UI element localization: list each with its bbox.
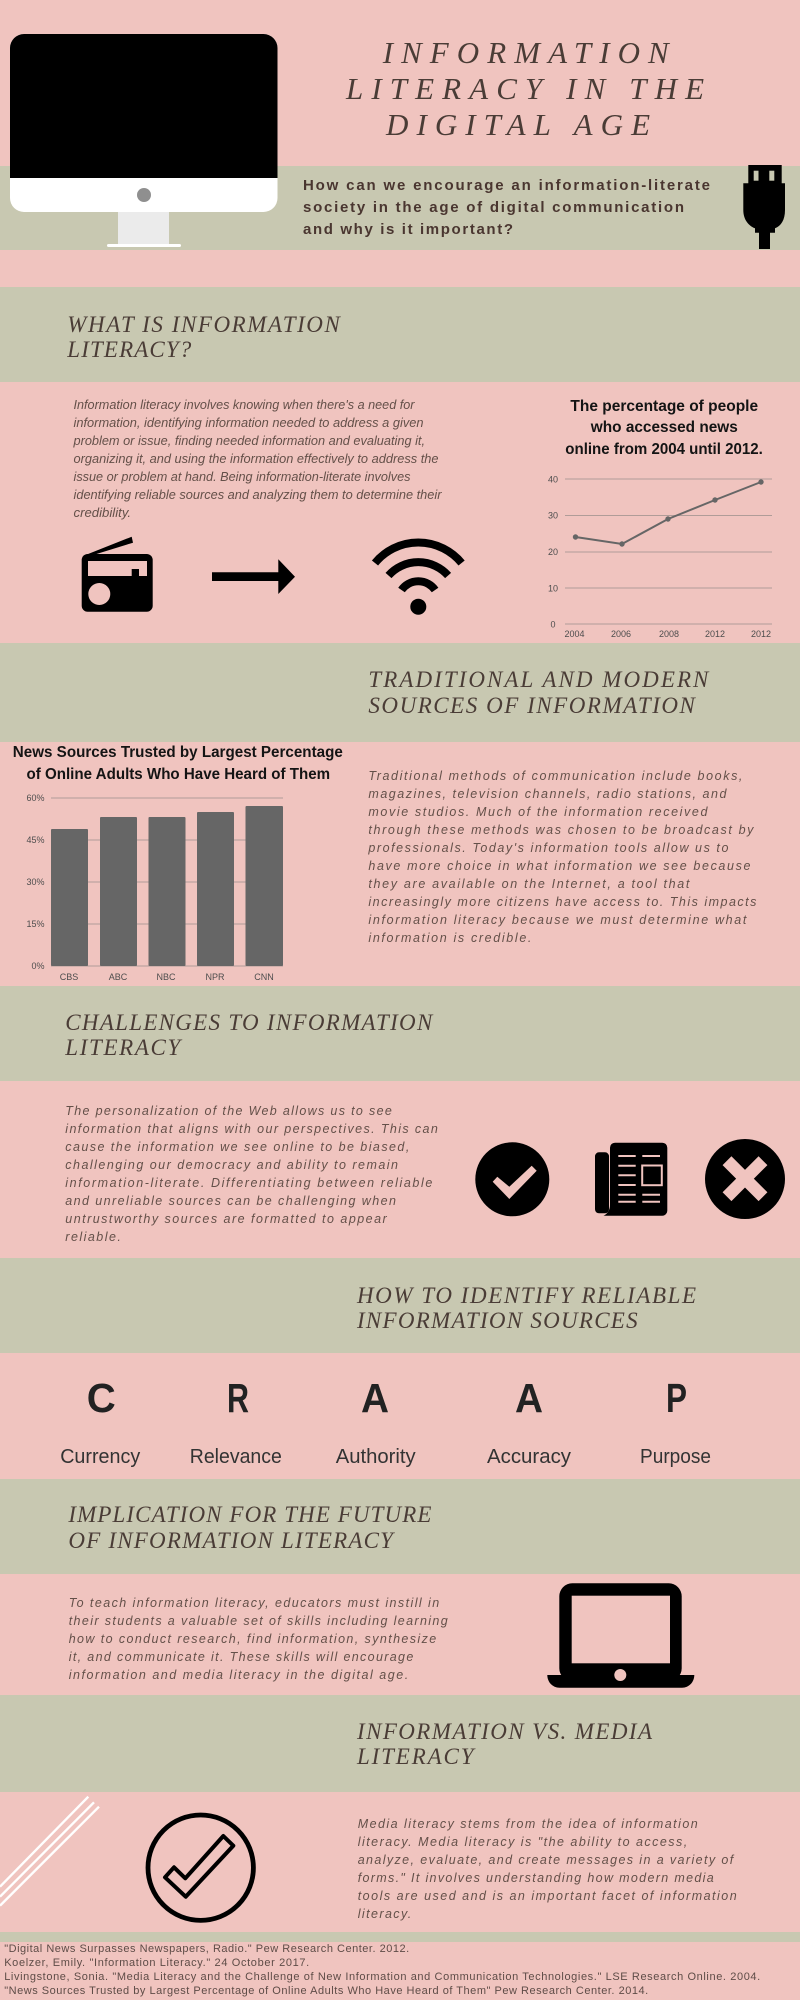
text: implication: it, and communicate it. These skills will encourage <box>69 1650 413 1664</box>
text: information vs media: tools are used and is an important facet of information <box>358 1889 737 1903</box>
heading: traditional and modern <box>368 667 710 718</box>
text: implication: how to conduct research, find information, synthesize <box>69 1632 436 1646</box>
y axis labels: 10 <box>548 584 558 594</box>
y axis labels: 15% <box>26 919 44 929</box>
text: challenges: cause the information we see online to be biased, <box>65 1140 409 1154</box>
heading: information vs media: LITERACY <box>356 1744 476 1769</box>
x axis labels <box>60 972 274 982</box>
heading: how to identify <box>356 1283 696 1333</box>
text: challenges: and unreliable sources can be challenging when <box>65 1194 396 1208</box>
text: what is information literacy <box>72 398 442 520</box>
text: challenges <box>65 1104 438 1244</box>
CRAAP words: Authority <box>336 1445 416 1468</box>
x axis labels: ABC <box>109 972 128 982</box>
text: traditional and modern: through these methods was chosen to be broadcast by <box>368 823 754 837</box>
heading: challenges: LITERACY <box>64 1035 183 1060</box>
text: traditional and modern: professionals. Today's information tools allow us to <box>367 841 728 855</box>
text: information vs media: forms." It involves understanding how modern media <box>358 1871 714 1885</box>
heading: information vs media <box>356 1719 653 1769</box>
CRAAP words: Accuracy <box>487 1445 572 1468</box>
CRAAP letters: A <box>361 1375 389 1421</box>
CRAAP words: Purpose <box>640 1445 711 1468</box>
text: implication: information and media literacy in the digital age. <box>69 1668 408 1682</box>
line chart: percentage of people who accessed news online <box>548 398 772 639</box>
text: traditional and modern: movie studios. Much of the information received <box>368 805 708 819</box>
heading: what is information literacy: WHAT IS INFORMATION <box>67 312 341 337</box>
text: challenges: The personalization of the Web allows us to see <box>65 1104 392 1118</box>
icon: wifi <box>375 543 462 615</box>
x axis labels: CNN <box>254 972 274 982</box>
text: information vs media: analyze, evaluate, and create messages in a variety of <box>358 1853 735 1867</box>
y axis labels <box>26 793 44 971</box>
data line <box>573 479 764 547</box>
text: traditional and modern: have more choice in what information we see because <box>368 859 750 873</box>
text: what is information literacy: Information literacy involves knowing when there's a need for <box>74 398 415 412</box>
CRAAP letters: P <box>666 1375 687 1421</box>
text: what is information literacy: issue or problem at hand. Being information-literate involves <box>74 470 410 484</box>
references: Livingstone, Sonia. "Media Literacy and the Challenge of New Information and Communication Technologies." LSE Research Online. 2004. <box>4 1971 760 1983</box>
heading: information vs media: INFORMATION VS. MEDIA <box>356 1719 653 1744</box>
references <box>4 1943 760 1997</box>
x axis labels: NBC <box>156 972 176 982</box>
y axis labels <box>548 474 558 630</box>
x axis labels: 2012 <box>705 629 725 639</box>
heading: traditional and modern: TRADITIONAL AND MODERN <box>368 667 710 692</box>
references: Koelzer, Emily. "Information Literacy." 24 October 2017. <box>4 1957 309 1969</box>
chart title: News Sources Trusted by Largest Percentage <box>13 744 343 761</box>
x axis labels: 2012 <box>751 629 771 639</box>
text: traditional and modern <box>367 769 756 945</box>
heading: traditional and modern: SOURCES OF INFORMATION <box>368 693 697 718</box>
heading: implication: OF INFORMATION LITERACY <box>68 1528 395 1553</box>
y axis labels: 45% <box>26 835 44 845</box>
title: DIGITAL AGE <box>385 107 650 142</box>
bar chart: news sources trusted <box>13 744 343 982</box>
heading: how to identify: INFORMATION SOURCES <box>356 1308 638 1333</box>
text: challenges: information that aligns with our perspectives. This can <box>65 1122 438 1136</box>
CRAAP words <box>60 1445 711 1468</box>
text: information vs media <box>358 1817 737 1921</box>
y axis labels: 30 <box>548 510 558 520</box>
icon: usb plug <box>743 165 785 249</box>
chart title <box>565 398 763 458</box>
CRAAP letters: R <box>227 1375 249 1421</box>
x axis labels: 2008 <box>659 629 679 639</box>
text: challenges: untrustworthy sources are formatted to appear <box>65 1212 388 1226</box>
icon: arrow <box>212 559 295 594</box>
text: traditional and modern: information is credible. <box>368 931 531 945</box>
subtitle question <box>303 177 710 238</box>
heading: what is information literacy: LITERACY? <box>66 337 192 362</box>
text: challenges: information-literate. Differentiating between reliable <box>65 1176 432 1190</box>
text: information vs media: Media literacy stems from the idea of information <box>358 1817 698 1831</box>
band: what is information literacy <box>0 287 800 382</box>
icon: radio <box>82 537 153 612</box>
text: information vs media: literacy. <box>358 1907 411 1921</box>
x axis labels: NPR <box>205 972 225 982</box>
title <box>345 35 704 142</box>
heading: challenges: CHALLENGES TO INFORMATION <box>65 1010 434 1035</box>
CRAAP letters <box>87 1375 687 1421</box>
band: how to identify <box>0 1258 800 1353</box>
decorative diagonal lines <box>0 1797 99 1906</box>
y axis labels: 40 <box>548 474 558 484</box>
text: what is information literacy: credibility. <box>74 506 131 520</box>
x axis labels <box>564 629 771 639</box>
y axis labels: 20 <box>548 547 558 557</box>
icon: outlined check circle <box>148 1815 253 1920</box>
chart title <box>13 744 343 783</box>
y axis labels: 0% <box>31 961 44 971</box>
references: "News Sources Trusted by Largest Percentage of Online Adults Who Have Heard of Them" Pew Research Center. 2014. <box>4 1985 648 1997</box>
icon: newspaper <box>595 1143 667 1216</box>
text: challenges: reliable. <box>65 1230 121 1244</box>
y axis labels: 60% <box>26 793 44 803</box>
text: traditional and modern: information literacy because we must determine what <box>368 913 747 927</box>
text: information vs media: literacy. Media literacy is "the ability to access, <box>358 1835 687 1849</box>
chart title: of Online Adults Who Have Heard of Them <box>26 766 330 783</box>
text: what is information literacy: identifying reliable sources and analyzing them to determine their <box>74 488 442 502</box>
text: traditional and modern: Traditional methods of communication include books, <box>368 769 742 783</box>
subtitle question: society in the age of digital communication <box>303 199 684 216</box>
title: INFORMATION <box>382 35 671 70</box>
icon: check mark circle <box>475 1142 549 1216</box>
band: information vs media <box>0 1695 800 1792</box>
y axis labels: 30% <box>26 877 44 887</box>
text: traditional and modern: magazines, television channels, radio stations, and <box>368 787 727 801</box>
heading: how to identify: HOW TO IDENTIFY RELIABLE <box>356 1283 696 1308</box>
x axis labels: 2004 <box>564 629 585 639</box>
y axis labels: 0 <box>550 620 556 630</box>
band: implication <box>0 1479 800 1574</box>
text: traditional and modern: increasingly more citizens have access to. This impacts <box>368 895 756 909</box>
text: what is information literacy: information, identifying information needed to address a given <box>74 416 424 430</box>
title: LITERACY IN THE <box>345 71 704 106</box>
heading: implication: IMPLICATION FOR THE FUTURE <box>67 1502 431 1527</box>
chart title: who accessed news <box>590 419 738 436</box>
band: footer strip <box>0 1932 800 1942</box>
text: traditional and modern: they are available on the Internet, a tool that <box>368 877 690 891</box>
bars <box>51 806 283 966</box>
subtitle question: How can we encourage an information-literate <box>303 177 710 194</box>
CRAAP words: Currency <box>60 1445 141 1468</box>
CRAAP words: Relevance <box>190 1445 282 1468</box>
band: challenges <box>0 986 800 1081</box>
text: what is information literacy: organizing it, and using the information effectively to address the <box>74 452 439 466</box>
text: challenges: challenging our democracy and ability to remain <box>65 1158 398 1172</box>
icon: desktop monitor <box>10 34 278 247</box>
band: traditional and modern <box>0 643 800 742</box>
text: implication: their students a valuable set of skills including learning <box>69 1614 448 1628</box>
heading: implication <box>67 1502 431 1553</box>
icon: x mark circle <box>705 1139 785 1219</box>
heading: challenges <box>64 1010 434 1060</box>
x axis labels: CBS <box>60 972 78 982</box>
chart title: The percentage of people <box>570 398 758 415</box>
text: implication <box>69 1596 448 1682</box>
chart title: online from 2004 until 2012. <box>565 441 763 458</box>
text: what is information literacy: problem or issue, finding needed information and evaluating it, <box>72 434 425 448</box>
text: implication: To teach information literacy, educators must instill in <box>69 1596 439 1610</box>
band: subtitle <box>0 166 800 250</box>
CRAAP letters: C <box>87 1375 116 1421</box>
CRAAP letters: A <box>515 1375 543 1421</box>
icon: laptop <box>547 1583 694 1688</box>
x axis labels: 2006 <box>611 629 631 639</box>
subtitle question: and why is it important? <box>303 221 513 238</box>
references: "Digital News Surpasses Newspapers, Radio." Pew Research Center. 2012. <box>4 1943 409 1955</box>
heading: what is information literacy <box>66 312 341 362</box>
